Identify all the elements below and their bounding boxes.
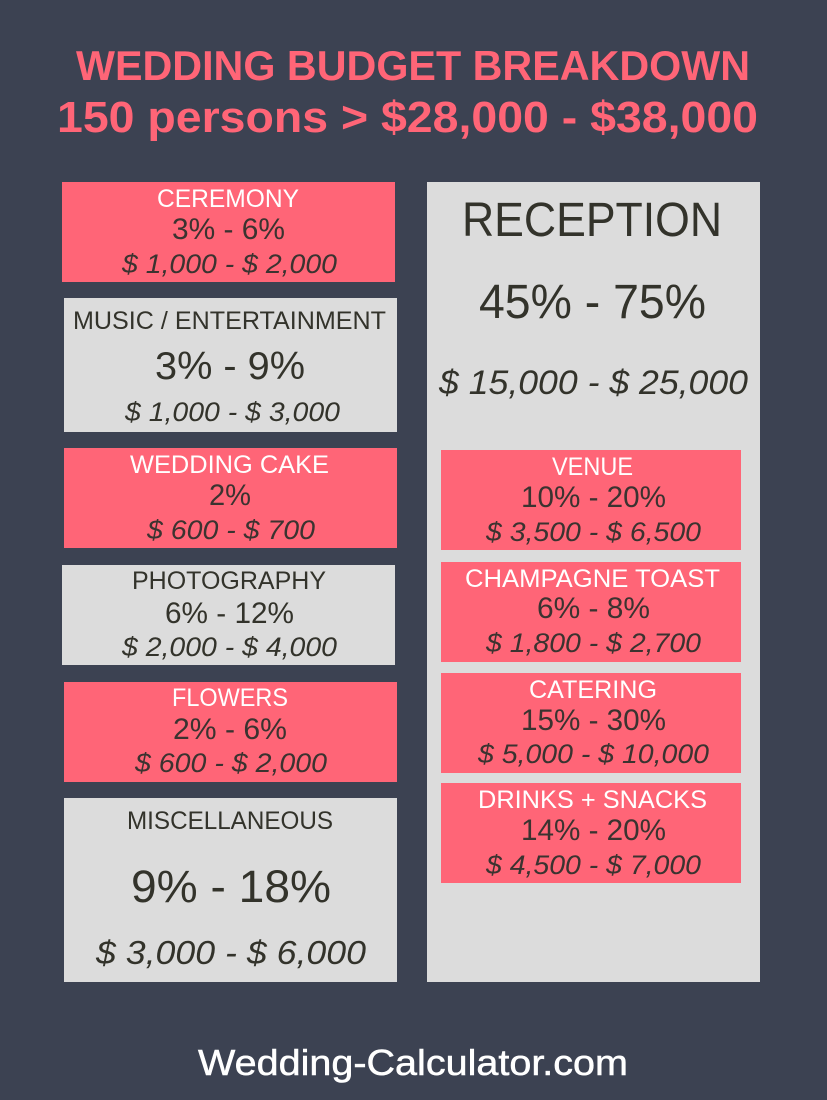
- sub-panel: catering: $ 5,000 - $ 10,000: [477, 739, 709, 769]
- sub-panel: catering: 15% - 30%: [521, 704, 666, 737]
- panel: flowers: [64, 682, 397, 782]
- panel: music / entertainment: [64, 298, 397, 432]
- panel: wedding cake: WEDDING CAKE: [130, 451, 329, 479]
- panel: photography: 6% - 12%: [165, 597, 294, 630]
- reception amount: $ 15,000 - $ 25,000: [438, 364, 748, 402]
- panel: flowers: 2% - 6%: [173, 713, 287, 746]
- sub-panel: catering: [441, 673, 741, 773]
- panel: music / entertainment: MUSIC / ENTERTAINMENT: [73, 307, 386, 335]
- panel: miscellaneous: $ 3,000 - $ 6,000: [95, 934, 367, 971]
- sub-panel: venue: VENUE: [552, 453, 633, 481]
- sub-panel: champagne toast: $ 1,800 - $ 2,700: [485, 628, 701, 658]
- title: 150 persons > $28,000 - $38,000: [57, 93, 758, 142]
- title: WEDDING BUDGET BREAKDOWN: [76, 42, 750, 89]
- footer: website: Wedding-Calculator.com: [198, 1042, 628, 1083]
- sub-panel: drinks + snacks: $ 4,500 - $ 7,000: [485, 850, 701, 880]
- reception heading: RECEPTION: [462, 194, 722, 247]
- sub-panel: drinks + snacks: [441, 783, 741, 883]
- panel: music / entertainment: $ 1,000 - $ 3,000: [124, 397, 340, 427]
- reception percent: 45% - 75%: [479, 276, 706, 329]
- panel: flowers: $ 600 - $ 2,000: [134, 748, 327, 778]
- panel: photography: PHOTOGRAPHY: [132, 567, 326, 595]
- sub-panel: catering: CATERING: [529, 676, 657, 704]
- sub-panel: champagne toast: [441, 562, 741, 662]
- panel: ceremony: [62, 182, 395, 282]
- sub-panel: venue: [441, 450, 741, 550]
- panel: reception: [427, 182, 760, 982]
- panel: miscellaneous: [64, 798, 397, 982]
- panel: ceremony: $ 1,000 - $ 2,000: [121, 249, 337, 279]
- panel: miscellaneous: MISCELLANEOUS: [127, 807, 333, 835]
- sub-panel: drinks + snacks: 14% - 20%: [521, 814, 666, 847]
- sub-panel: drinks + snacks: DRINKS + SNACKS: [478, 786, 707, 814]
- panel: flowers: FLOWERS: [172, 684, 288, 712]
- panel: wedding cake: [64, 448, 397, 548]
- sub-panel: champagne toast: CHAMPAGNE TOAST: [465, 565, 720, 593]
- panel: photography: $ 2,000 - $ 4,000: [121, 632, 337, 662]
- panel: photography: [62, 565, 395, 665]
- panel: wedding cake: $ 600 - $ 700: [146, 515, 315, 545]
- panel: wedding cake: 2%: [209, 479, 251, 512]
- panel: ceremony: CEREMONY: [157, 185, 299, 213]
- panel: music / entertainment: 3% - 9%: [155, 345, 305, 388]
- sub-panel: venue: $ 3,500 - $ 6,500: [485, 517, 701, 547]
- title: [57, 42, 758, 142]
- sub-panel: champagne toast: 6% - 8%: [537, 592, 650, 625]
- panel: miscellaneous: 9% - 18%: [131, 861, 331, 912]
- sub-panel: venue: 10% - 20%: [521, 481, 666, 514]
- panel: ceremony: 3% - 6%: [172, 213, 285, 246]
